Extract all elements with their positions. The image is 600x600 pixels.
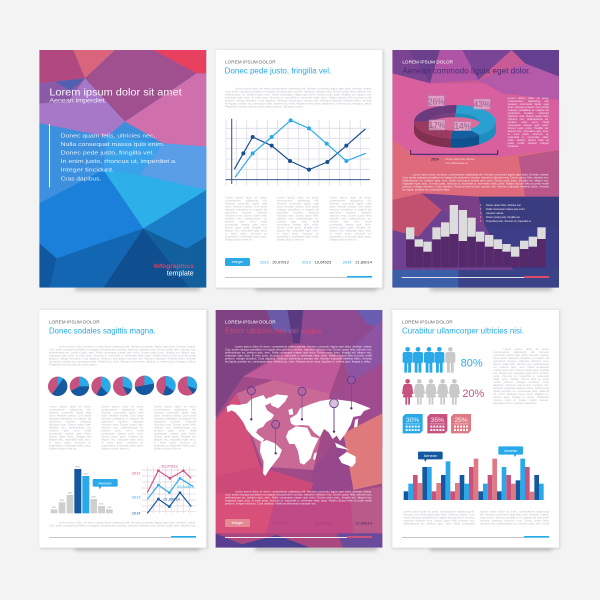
cover text block: Donec pede justo, fringilla vel. bbox=[61, 150, 154, 156]
page 3 bullet list: Donec pede justo, fringilla vel. bbox=[486, 215, 521, 219]
floating bar chart bbox=[406, 205, 546, 267]
cover text block: In enim justo, rhoncus ut, imperdiet a. bbox=[61, 159, 177, 165]
page 4 footer rule bbox=[49, 536, 196, 538]
bar chart callout bbox=[93, 479, 118, 489]
page 5 footer stats: 2014 bbox=[343, 521, 352, 526]
page 3 bullet list: Aenean massa. bbox=[486, 211, 504, 215]
page 2 footer stats: 20,97912 bbox=[272, 260, 290, 265]
page 4 kicker: LOREM IPSUM DOLOR bbox=[49, 319, 100, 324]
page 6 footer rule bbox=[402, 536, 549, 538]
page 3 heading: Aenean commodo ligula eget dolor. bbox=[402, 67, 531, 76]
multi-line chart: 19,64323 bbox=[177, 484, 194, 489]
page 2 intro text: Lorem ipsum dolor sit amet, consectetuer adipiscing elit. Aenean commodo ligula eget dolor. Aenean massa. Cum sociis natoque penatibus et magnis dis parturient montes, nascetur ridiculus mus. Donec quam felis, ultricies nec, pellentesque eu, pretium quis, sem. Nulla consequat massa quis enim. Donec pede justo, fringilla vel, aliquet nec, vulputate eget, arcu. In enim justo, rhoncus ut, imperdiet a, venenatis vitae, justo. Nullam dictum felis eu pede mollis pretium. Integer tincidunt. Cras dapibus. Vivamus elementum semper nisi. Aenean vulputate eleifend tellus. Aenean leo ligula, porttitor eu, consequat vitae, eleifend ac, enim. Aliquam lorem ante, dapibus in, viverra quis, feugiat a, tellus. Phasellus viverra nulla ut metus varius laoreet. Quisque rutrum. bbox=[225, 87, 372, 108]
bar chart: 25% bbox=[92, 497, 96, 499]
cover text block: Cras dapibus. bbox=[61, 176, 102, 182]
page 3 footer rule bbox=[402, 276, 549, 278]
row of pie charts bbox=[48, 376, 197, 396]
donut caption: 2014 bbox=[431, 158, 439, 162]
page 3 kicker: LOREM IPSUM DOLOR bbox=[402, 59, 454, 64]
page 5 footer stats: 2013 bbox=[302, 521, 312, 526]
dark callout bbox=[418, 452, 443, 462]
cover text block: Donec quam felis, ultricies nec, bbox=[61, 133, 156, 139]
page 2 footer stats: 21,89014 bbox=[355, 260, 373, 265]
page 4 text column 3: Lorem ipsum dolor sit amet, consectetuer adipiscing elit. Aenean commodo ligula eget dolor. Aenean massa. Cum sociis natoque penatibus et magnis dis parturient montes, nascetur ridiculus mus. Donec quam felis, ultricies nec, pellentesque eu, pretium quis, sem. Nulla consequat massa quis enim. Donec pede justo, fringilla vel, aliquet nec, vulputate eget, arcu. In enim justo, rhoncus ut, imperdiet a, venenatis vitae, justo. Nullam dictum felis eu. bbox=[154, 405, 196, 450]
page 5 footer stats: 19,64323 bbox=[315, 521, 332, 526]
percentage badges: 35% bbox=[431, 417, 444, 424]
page 2 footer stats bbox=[225, 258, 373, 266]
cover text block: Integer tincidunt. bbox=[61, 168, 114, 174]
bar chart: 40% bbox=[68, 493, 72, 495]
page 2 kicker: LOREM IPSUM DOLOR bbox=[225, 59, 276, 64]
line chart bbox=[226, 118, 370, 186]
dark callout: Aenean bbox=[424, 454, 437, 458]
page 5 footer stats bbox=[225, 519, 373, 527]
page 2 footer stats: 2012 bbox=[260, 260, 270, 265]
page 2 text column 1: Lorem ipsum dolor sit amet, consectetuer adipiscing elit. Aenean commodo ligula eget dolor. Aenean massa. Cum sociis natoque penatibus et magnis dis parturient montes, nascetur ridiculus mus. Donec quam felis, ultricies nec, pellentesque eu, pretium quis, sem. Nulla consequat massa quis enim. Donec pede justo, fringilla vel, aliquet nec, vulputate eget, arcu. In enim justo, rhoncus ut, imperdiet a, venenatis vitae, justo. Nullam dictum felis eu. bbox=[225, 196, 267, 241]
light callout bbox=[498, 446, 523, 457]
multi-line chart: 2014 bbox=[132, 510, 141, 515]
cover subtitle: Aenean imperdiet. bbox=[49, 99, 107, 105]
multi-line chart: 20,97912 bbox=[161, 464, 178, 469]
donut bracket bbox=[411, 150, 498, 154]
cover text block bbox=[61, 133, 177, 182]
cover title: Lorem ipsum dolor sit amet bbox=[49, 88, 182, 99]
page 2 footer stats: Integer bbox=[232, 260, 244, 264]
page 2 footer stats: 2013 bbox=[302, 260, 312, 265]
world map bbox=[227, 394, 371, 476]
bar chart bbox=[51, 467, 113, 513]
page 5 heading: Etiam ultricies nisi vel augue. bbox=[225, 327, 324, 336]
page 4 heading: Donec sodales sagittis magna. bbox=[49, 327, 156, 336]
page 2 text column 3: Lorem ipsum dolor sit amet, consectetuer adipiscing elit. Aenean commodo ligula eget dolor. Aenean massa. Cum sociis natoque penatibus et magnis dis parturient montes, nascetur ridiculus mus. Donec quam felis, ultricies nec, pellentesque eu, pretium quis, sem. Nulla consequat massa quis enim. Donec pede justo, fringilla vel, aliquet nec, vulputate eget, arcu. In enim justo, rhoncus ut, imperdiet a, venenatis vitae, justo. Nullam dictum felis eu. bbox=[329, 196, 372, 241]
20 percent label: 20% bbox=[462, 388, 485, 400]
percentage badges: 25% bbox=[454, 417, 468, 424]
page 2 footer stats: 19,64323 bbox=[315, 260, 332, 265]
panel: people and bars page bbox=[392, 310, 559, 548]
page 4 text column 2: Lorem ipsum dolor sit amet, consectetuer adipiscing elit. Aenean commodo ligula eget dolor. Aenean massa. Cum sociis natoque penatibus et magnis dis parturient montes, nascetur ridiculus mus. Donec quam felis, ultricies nec, pellentesque eu, pretium quis, sem. Nulla consequat massa quis enim. Donec pede justo, fringilla vel, aliquet nec, vulputate eget, arcu. In enim justo, rhoncus ut, imperdiet a, venenatis vitae, justo. Nullam dictum felis eu. bbox=[101, 405, 144, 450]
panel: cover page bbox=[39, 50, 206, 288]
map pins bbox=[247, 376, 355, 454]
bar chart: 15% bbox=[99, 504, 104, 506]
donut caption bbox=[431, 158, 474, 164]
page 5 footer stats: 20,97912 bbox=[272, 521, 290, 526]
bar chart: 80% bbox=[76, 467, 80, 469]
bar chart: 10% bbox=[107, 507, 112, 509]
donut chart: 17% bbox=[429, 120, 446, 130]
cover footer label bbox=[154, 263, 194, 277]
panel: pies and charts page bbox=[39, 310, 206, 548]
percentage badges bbox=[403, 414, 471, 433]
multi-line chart: 2013 bbox=[132, 495, 141, 500]
panel: line chart page bbox=[216, 50, 382, 288]
bar chart: 10% bbox=[52, 507, 56, 509]
donut chart: 14% bbox=[454, 121, 472, 131]
grouped bar chart bbox=[404, 459, 544, 500]
page 4 intro text: Lorem ipsum dolor sit amet, consectetuer adipiscing elit. Aenean commodo ligula eget dolor. Aenean massa. Cum sociis natoque penatibus et magnis dis parturient montes, nascetur ridiculus mus. Donec quam felis, ultricies nec, pellentesque eu, pretium quis, sem. Nulla consequat massa quis enim. Donec pede justo, fringilla vel, aliquet nec, vulputate eget, arcu. In enim justo, rhoncus ut, imperdiet a, venenatis vitae, justo. Nullam dictum felis eu pede mollis pretium. Integer tincidunt. Cras dapibus. Vivamus elementum semper nisi. Aenean vulputate eleifend tellus. Aenean leo ligula, porttitor eu, consequat vitae, eleifend ac, enim. Aliquam lorem ante, dapibus in, viverra quis, feugiat a, tellus. Phasellus viverra nulla ut metus varius. bbox=[49, 345, 196, 366]
multi-line chart bbox=[132, 464, 196, 515]
panel: donut and bars page bbox=[392, 50, 559, 288]
donut chart: 26% bbox=[428, 96, 445, 106]
cover text block: Nulla consequat massa quis enim. bbox=[61, 142, 165, 148]
female people pictogram bbox=[402, 379, 460, 405]
page 2 text column 2: Lorem ipsum dolor sit amet, consectetuer adipiscing elit. Aenean commodo ligula eget dolor. Aenean massa. Cum sociis natoque penatibus et magnis dis parturient montes, nascetur ridiculus mus. Donec quam felis, ultricies nec, pellentesque eu, pretium quis, sem. Nulla consequat massa quis enim. Donec pede justo, fringilla vel, aliquet nec, vulputate eget, arcu. In enim justo, rhoncus ut, imperdiet a, venenatis vitae, justo. Nullam dictum felis eu. bbox=[277, 196, 319, 241]
page 3 side text: Lorem ipsum dolor sit amet, consectetuer adipiscing elit. Aenean commodo ligula eget dolor. Aenean massa. Cum sociis natoque penatibus et magnis dis parturient montes, nascetur ridiculus mus. Donec quam felis, ultricies nec, pellentesque eu, pretium quis, sem. Nulla consequat massa quis enim. Donec pede justo, fringilla vel, aliquet nec, vulputate eget, arcu. In enim justo, rhoncus ut, imperdiet a, venenatis vitae, justo. Nullam dictum felis eu pede mollis pretium integer tincidunt. bbox=[508, 97, 549, 148]
page 5 footer rule bbox=[225, 536, 372, 538]
page 5 footer stats: Integer bbox=[232, 521, 244, 525]
cover accent rule bbox=[49, 124, 50, 188]
page 2 heading: Donec pede justo, fringilla vel. bbox=[225, 67, 331, 76]
cover footer label: Infographics bbox=[154, 263, 194, 270]
donut chart bbox=[414, 96, 496, 148]
page 3 bullet list: Donec quam felis, ultricies nec. bbox=[486, 203, 522, 207]
multi-line chart: 2012 bbox=[132, 470, 141, 475]
panel: world map page bbox=[216, 310, 382, 548]
page 5 footer stats: 21,89014 bbox=[355, 521, 373, 526]
page 2 footer rule bbox=[225, 276, 372, 278]
donut caption: nec pellentesque eu. bbox=[446, 162, 469, 165]
page 4 text column 1: Lorem ipsum dolor sit amet, consectetuer adipiscing elit. Aenean commodo ligula eget dolor. Aenean massa. Cum sociis natoque penatibus et magnis dis parturient montes, nascetur ridiculus mus. Donec quam felis, ultricies nec, pellentesque eu, pretium quis, sem. Nulla consequat massa quis enim. Donec pede justo, fringilla vel, aliquet nec, vulputate eget, arcu. In enim justo, rhoncus ut, imperdiet a, venenatis vitae, justo. Nullam dictum felis eu. bbox=[49, 405, 91, 450]
page 3 bullet list: Imperdiet justo, rhoncus ut, imperdiet a. bbox=[486, 219, 532, 223]
page 5 lower text: Lorem ipsum dolor sit amet, consectetuer adipiscing elit. Aenean commodo ligula eget dolor. Aenean massa. Cum sociis natoque penatibus et magnis dis parturient montes, nascetur ridiculus mus. Donec quam felis, ultricies nec, pellentesque eu, pretium quis, sem. Nulla consequat massa quis enim. Donec pede justo, fringilla vel, aliquet nec, vulputate eget, arcu. In enim justo, rhoncus ut, imperdiet a, venenatis vitae, justo. Nullam dictum felis eu pede mollis pretium. Integer tincidunt. Cras dapibus. Vivamus elementum semper nisi. bbox=[225, 490, 372, 505]
page 5 footer stats: 2012 bbox=[260, 521, 270, 526]
percentage badges: 30% bbox=[406, 417, 419, 424]
80 percent label: 80% bbox=[461, 358, 483, 370]
page 2 footer stats: 2014 bbox=[343, 260, 352, 265]
page 5 kicker: LOREM IPSUM DOLOR bbox=[225, 319, 276, 324]
page 6 kicker: LOREM IPSUM DOLOR bbox=[402, 319, 453, 324]
page 3 center text: Lorem ipsum dolor sit amet, consectetuer adipiscing elit. Aenean commodo ligula eget dolor. Aenean massa. Cum sociis natoque penatibus et magnis dis parturient montes, nascetur ridiculus mus. Donec quam felis, ultricies nec, pellentesque eu, pretium quis, sem. Nulla consequat massa quis enim. Donec pede justo, fringilla vel, aliquet nec, vulputate eget, arcu. In enim justo, rhoncus ut, imperdiet a, venenatis vitae, justo. Nullam dictum felis eu pede mollis pretium. Integer tincidunt. Cras dapibus. Vivamus elementum semper nisi. Aenean vulputate eleifend tellus. Aenean leo ligula, porttitor eu, consequat vitae. bbox=[402, 173, 549, 191]
page 3 bullet list: Nulla consequat massa quis enim. bbox=[486, 207, 526, 211]
light callout: Aenean bbox=[504, 449, 517, 453]
cover footer label: template bbox=[167, 270, 194, 277]
male people pictogram bbox=[403, 347, 455, 373]
donut caption: Donec quam felis, ultricies bbox=[446, 158, 475, 161]
donut chart: 43% bbox=[474, 99, 491, 109]
multi-line chart: 21,89014 bbox=[163, 497, 181, 502]
page 3 bullet list bbox=[480, 203, 532, 223]
bar chart: 20% bbox=[60, 500, 64, 502]
page 5 intro text: Lorem ipsum dolor sit amet, consectetuer adipiscing elit. Aenean commodo ligula eget dolor. Aenean massa. Cum sociis natoque penatibus et magnis dis parturient montes, nascetur ridiculus mus. Donec quam felis, ultricies nec, pellentesque eu, pretium quis, sem. Nulla consequat massa quis enim. Donec pede justo, fringilla vel, aliquet nec, vulputate eget, arcu. In enim justo, rhoncus ut, imperdiet a, venenatis vitae, justo. Nullam dictum felis eu pede mollis pretium. Integer tincidunt. Cras dapibus. Vivamus elementum semper nisi. Aenean vulputate eleifend tellus. Aenean leo ligula, porttitor eu, consequat vitae, eleifend ac, enim. Aliquam lorem ante, dapibus in, viverra quis, feugiat a, tellus. bbox=[225, 345, 372, 363]
page 6 heading: Curabitur ullamcorper ultricies nisi. bbox=[402, 327, 524, 336]
bar chart callout: Aenean bbox=[98, 481, 112, 485]
page 6 side text: Lorem ipsum dolor sit amet, consectetuer adipiscing elit. Aenean commodo ligula eget dolor. Aenean massa. Cum sociis natoque penatibus et magnis dis parturient montes, nascetur ridiculus mus. Donec quam felis, ultricies nec, pellentesque eu, pretium quis, sem. Nulla consequat massa quis enim. Donec pede justo, fringilla vel, aliquet nec, vulputate eget, arcu. In enim justo, rhoncus ut, imperdiet a, venenatis vitae, justo. Nullam dictum felis eu pede mollis pretium. Integer tincidunt. Cras dapibus. Vivamus elementum semper nisi. Aenean vulputate eleifend tellus. Aenean leo ligula, porttitor eu, consequat vitae, eleifend ac, enim. Aliquam lorem ante, dapibus in, viverra quis, feugiat a, tellus. Phasellus viverra nulla ut metus varius laoreet. Quisque rutrum. Aenean imperdiet. bbox=[493, 348, 549, 405]
bar chart: 60% bbox=[84, 474, 88, 476]
